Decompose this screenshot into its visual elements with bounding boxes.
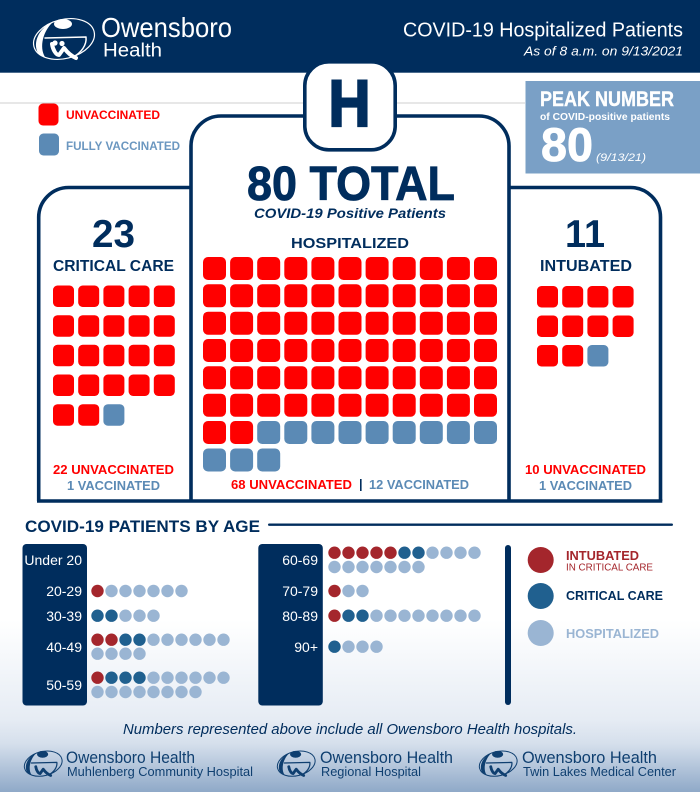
callout: peak number: (9/13/21) [596,152,646,164]
legend: patient status: HOSPITALIZED [566,627,659,641]
footnote: Numbers represented above include all Owensboro Health hospitals. [123,721,577,738]
age labels column: 50-59 [46,677,82,693]
legend: patient status: INTUBATED [566,549,639,563]
legend: patient status: IN CRITICAL CARE [566,562,653,574]
critical care squares [53,286,175,426]
critical care count: 23 [92,213,135,256]
icon: hospital H badge [305,62,395,150]
critical care heading: CRITICAL CARE [53,258,174,275]
dots: 30-39 [91,610,160,622]
panel: intubated [509,187,661,501]
dots: 90+ [328,640,383,653]
logo: Muhlenberg Community Hospital: Owensboro Health [66,748,195,767]
dots: 40-49 [91,634,230,660]
report title: COVID-19 Hospitalized Patients [403,20,683,42]
age labels column: 30-39 [46,608,82,624]
panel: critical care [39,187,191,501]
age labels column: 70-79 [282,583,318,599]
intubated squares [537,286,634,366]
critical care totals: 1 VACCINATED [67,479,160,493]
age labels column: 40-49 [46,639,82,655]
report title [403,20,683,58]
hospitalized squares [203,257,497,472]
intubated count: 11 [565,213,605,256]
intubated totals [525,463,646,493]
panel: hospitalized total [37,116,662,501]
hospitalized totals: 68 UNVACCINATED [231,478,352,492]
brand name: Health [103,40,162,62]
hospitalized totals [231,478,469,492]
age chart: 60-69 to 90+ [258,544,481,706]
legend: vaccination status [38,104,180,156]
heading: patients by age: COVID-19 PATIENTS BY AGE [25,518,260,536]
logo: Regional Hospital: Owensboro Health [320,748,453,767]
intubated heading: INTUBATED [540,258,632,275]
callout: peak number: of COVID-positive patients [540,112,670,123]
logo: Twin Lakes Medical Center: Twin Lakes Medical Center [523,764,677,779]
report title: As of 8 a.m. on 9/13/2021 [523,44,683,58]
logo: Muhlenberg Community Hospital [22,747,253,780]
legend: patient status: CRITICAL CARE [566,589,663,603]
age labels column [22,544,87,706]
logo: Twin Lakes Medical Center: Owensboro Health [522,748,657,767]
critical care totals: 22 UNVACCINATED [53,463,174,477]
hospitalized heading: HOSPITALIZED [291,235,409,252]
age labels column: Under 20 [24,552,82,568]
dots: 70-79 [328,585,369,597]
age labels column [258,544,323,706]
dots: 20-29 [91,585,188,597]
legend: vaccination status: FULLY VACCINATED [66,139,180,153]
total subtitle: COVID-19 Positive Patients [254,205,446,221]
brand name: Owensboro [101,12,232,43]
dots: 50-59 [91,672,230,698]
intubated totals: 10 UNVACCINATED [525,463,646,477]
logo: Regional Hospital: Regional Hospital [321,764,421,779]
hospitalized totals: 12 VACCINATED [369,478,469,492]
age labels column: 90+ [294,639,318,655]
total count: 80 TOTAL [247,158,455,211]
dots: 80-89 [328,610,481,622]
callout: peak number: 80 [541,118,593,171]
legend: patient status [528,547,663,646]
dots: 60-69 [328,546,481,573]
header banner [0,0,700,73]
legend: vaccination status: UNVACCINATED [66,108,160,122]
logo: Twin Lakes Medical Center [477,747,677,780]
icon: Owensboro Health logo [29,13,99,65]
icon: hospital H badge: H [328,66,370,140]
age labels column: 80-89 [282,608,318,624]
critical care totals [53,463,174,493]
intubated totals: 1 VACCINATED [539,479,632,493]
age chart: under 20 to 50-59 [22,544,230,706]
brand name [101,12,232,62]
age labels column: 60-69 [282,552,318,568]
callout: peak number: PEAK NUMBER [540,88,674,111]
age labels column: 20-29 [46,583,82,599]
callout: peak number [526,81,700,174]
logo: Regional Hospital [275,747,453,780]
logo: Muhlenberg Community Hospital: Muhlenberg Community Hospital [67,764,253,779]
